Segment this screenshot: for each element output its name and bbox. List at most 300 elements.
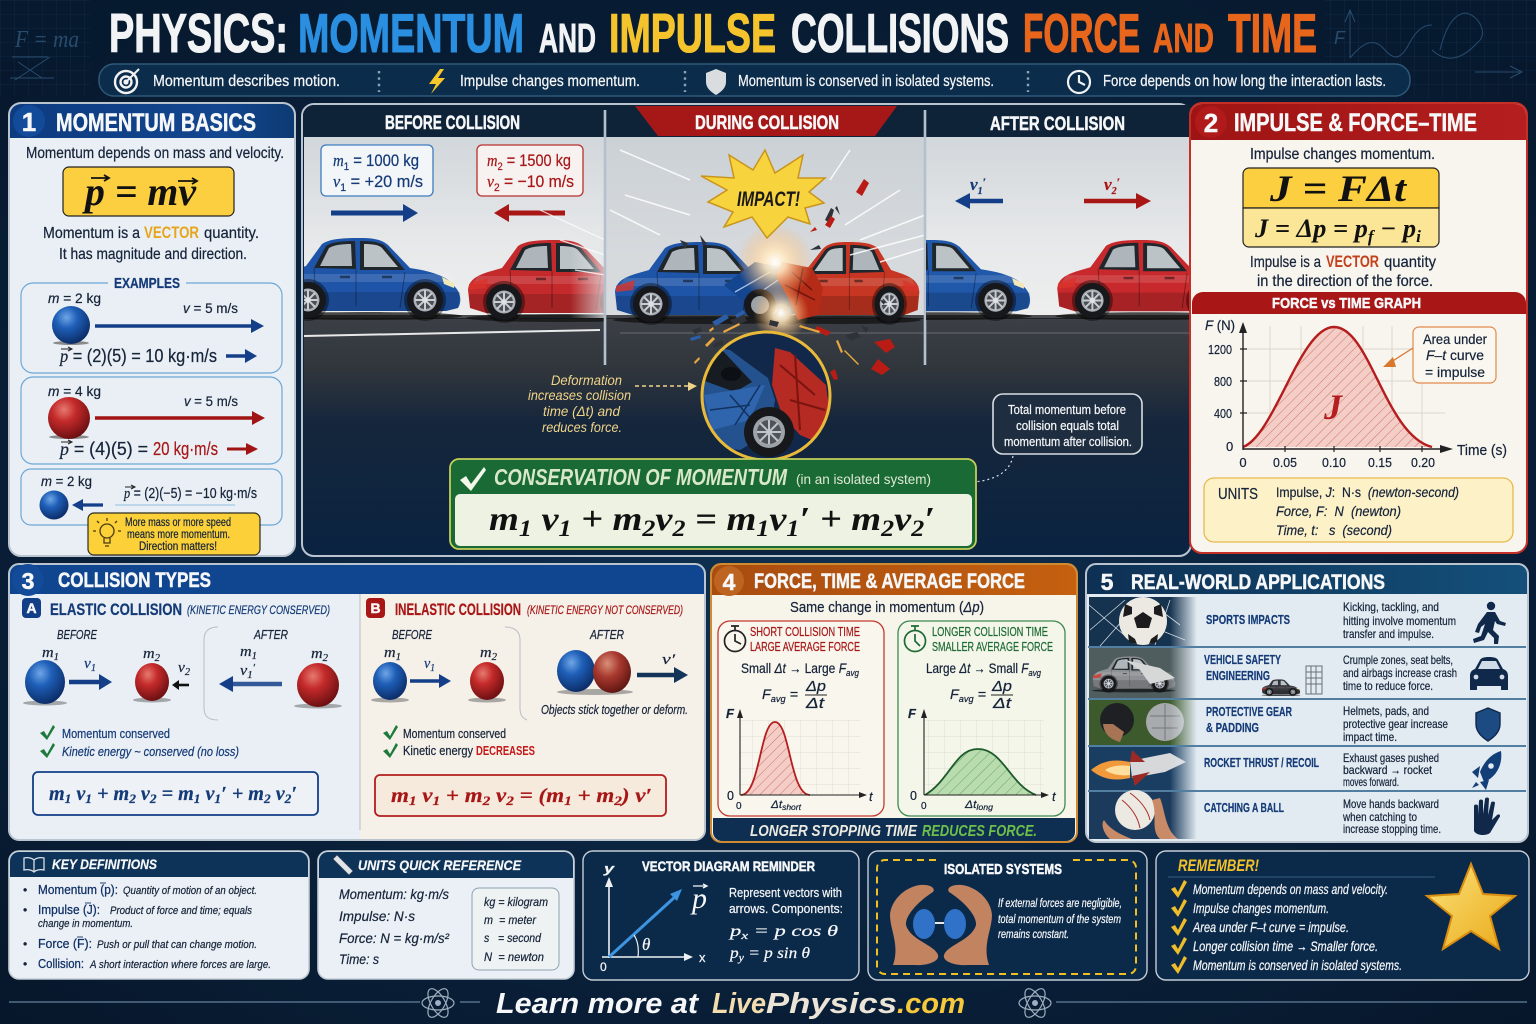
- conservation of momentum box: 2: [880, 516, 894, 541]
- unit abbreviations: kg = kilogram: [484, 895, 548, 909]
- force vs time chart: 400: [1214, 406, 1232, 421]
- inelastic formula: 2: [613, 793, 623, 808]
- icon: clock: [1068, 71, 1090, 93]
- definitions: Force (F):: [38, 937, 92, 951]
- subtitle bar: Momentum is conserved in isolated systems.: [738, 73, 994, 90]
- conservation of momentum box: 1: [786, 516, 799, 541]
- example 1: v = 5 m/s: [183, 300, 238, 316]
- definitions: [23, 883, 271, 971]
- decorative physics sketch: right: [1325, 0, 1536, 98]
- intro text: Momentum depends on mass and velocity.: [26, 145, 284, 162]
- inelastic checklist: DECREASES: [476, 744, 535, 758]
- heading: [13, 105, 256, 137]
- panel: remember: REMEMBER!: [1178, 857, 1259, 875]
- tip callout: means more momentum.: [127, 529, 230, 541]
- footer: .com: [897, 988, 965, 1020]
- elastic diagram: ′: [253, 663, 256, 674]
- before masses: car 1: [321, 145, 433, 196]
- conservation of momentum box: = m: [685, 501, 756, 538]
- elastic diagram: v: [240, 663, 247, 679]
- inelastic heading: B: [370, 600, 381, 616]
- chart: short collision: 0: [736, 801, 742, 812]
- panel 1: momentum basics: [9, 103, 295, 556]
- elastic diagram: 1: [54, 652, 59, 663]
- isolated text: If external forces are negligible,: [998, 896, 1122, 910]
- before masses: car 2: = 1500 kg: [503, 151, 571, 170]
- vector text: arrows. Components:: [729, 901, 843, 916]
- heading: during collision: [635, 106, 897, 136]
- inelastic diagram: AFTER: [589, 627, 624, 642]
- long collision card: Δt: [992, 695, 1012, 712]
- panel: remember: [1156, 851, 1529, 980]
- definitions: Collision:: [38, 957, 84, 971]
- icon: atom right: [1019, 986, 1051, 1020]
- short collision card: avg: [846, 668, 859, 678]
- after collision arrows: 1: [978, 186, 983, 197]
- icon: shield: [1476, 708, 1500, 741]
- icon: hand: [1474, 798, 1500, 835]
- icon: star: [1427, 864, 1515, 949]
- elastic diagram: 1: [247, 670, 253, 681]
- title: TIME: [1228, 2, 1317, 64]
- definitions: Quantity of motion of an object.: [123, 885, 257, 897]
- icon: target: [115, 69, 139, 93]
- conservation of momentum box: (in an isolated system): [796, 471, 931, 487]
- bubble: total momentum: [971, 394, 1142, 484]
- force vs time chart: 800: [1214, 374, 1232, 389]
- formula box J: i: [1416, 227, 1421, 246]
- conservation of momentum box: CONSERVATION OF MOMENTUM: [494, 464, 788, 490]
- after collision arrows: v: [1104, 175, 1112, 194]
- conservation of momentum box: v: [769, 501, 787, 538]
- vector text: p: [730, 923, 738, 940]
- conservation of momentum box: v: [532, 501, 560, 538]
- panel: isolated systems: ISOLATED SYSTEMS: [944, 861, 1062, 878]
- row: vehicle safety: Crumple zones, seat belts,: [1343, 653, 1453, 667]
- units box: Impulse, J: N·s (newton-second): [1276, 485, 1459, 500]
- formula box J: J = FΔt: [1269, 169, 1408, 210]
- inelastic checklist: [383, 725, 535, 758]
- force vs time chart: F (N): [1205, 317, 1235, 333]
- icon: stopwatch: [724, 626, 746, 652]
- before masses: car 1: 1: [344, 161, 349, 173]
- tip callout: Direction matters!: [139, 541, 217, 553]
- panel 5: real-world applications: [1086, 564, 1528, 842]
- inelastic formula: 1: [409, 793, 417, 808]
- footer: Learn more at: [496, 988, 699, 1020]
- row: vehicle safety: VEHICLE SAFETY: [1204, 652, 1281, 667]
- conservation of momentum box: 1: [756, 516, 769, 541]
- inelastic formula: 2: [481, 793, 491, 808]
- conservation of momentum box: m: [489, 501, 515, 538]
- formula box J: − p: [1374, 214, 1416, 243]
- panel 4: force, time and average force: [711, 564, 1077, 842]
- icon: check: [460, 467, 486, 491]
- before masses: car 1: 1: [340, 182, 346, 194]
- units box: Time, t: s (second): [1276, 523, 1392, 538]
- vector note: quantity.: [204, 225, 259, 242]
- isolated text: total momentum of the system: [998, 912, 1121, 926]
- heading: 2: [1204, 108, 1218, 138]
- conservation of momentum box: 1: [559, 516, 571, 541]
- elastic diagram: 1: [252, 651, 257, 662]
- conservation of momentum box: v: [655, 501, 673, 538]
- long collision card: LONGER COLLISION TIME: [932, 625, 1048, 639]
- formula box p = mv: [63, 167, 234, 216]
- definitions: A short interaction where forces are large.: [89, 959, 271, 971]
- row: catching a ball: when catching to: [1342, 810, 1417, 824]
- short collision card: [718, 621, 884, 816]
- checklist: Impulse changes momentum.: [1193, 900, 1329, 916]
- force vs time chart: 0.05: [1273, 455, 1297, 470]
- checklist: Momentum is conserved in isolated systems.: [1193, 957, 1402, 973]
- unit list: Force: N = kg·m/s²: [339, 930, 450, 946]
- subtitle bar: [99, 64, 1410, 96]
- before masses: car 1: v: [333, 172, 341, 191]
- footer: [9, 986, 1527, 1020]
- vector note: quantity: [1384, 254, 1436, 271]
- title: COLLISIONS: [791, 2, 1009, 64]
- elastic diagram: v: [178, 660, 185, 676]
- bubble: total momentum: Total momentum before: [1008, 402, 1126, 417]
- conservation of momentum box: 2: [641, 516, 655, 541]
- elastic diagram: 2: [323, 653, 328, 664]
- before masses: car 2: m: [487, 151, 497, 170]
- icon: lightning: [429, 69, 445, 94]
- after collision arrows: v: [970, 175, 978, 194]
- heading: 3: [22, 568, 34, 594]
- force vs time chart: 0.15: [1368, 455, 1392, 470]
- row: catching a ball: Move hands backward: [1343, 797, 1439, 811]
- tip callout: More mass or more speed: [125, 517, 231, 529]
- elastic diagram: m: [311, 646, 322, 662]
- conservation of momentum box: 1: [519, 516, 532, 541]
- elastic heading: ELASTIC COLLISION: [50, 600, 182, 619]
- footer: Live: [712, 988, 766, 1020]
- chart: long collision: 0: [910, 789, 917, 803]
- title: [109, 2, 1317, 64]
- title: AND: [1153, 15, 1214, 61]
- deformation text: increases collision: [528, 387, 631, 403]
- vector diagram: x: [699, 950, 706, 965]
- elastic diagram: 1: [91, 663, 96, 674]
- after collision cars: [926, 240, 1189, 321]
- heading: [12, 564, 211, 596]
- checklist: [1171, 880, 1402, 974]
- long collision card: SMALLER AVERAGE FORCE: [932, 640, 1053, 654]
- unit list: Momentum: kg·m/s: [339, 886, 449, 902]
- heading: [714, 566, 1025, 596]
- panel: collision scene: [270, 104, 1243, 556]
- before collision cars: [304, 238, 604, 323]
- short collision card: F: [762, 686, 771, 702]
- inelastic diagram: [371, 627, 688, 720]
- panel: vector diagram reminder: [583, 851, 859, 980]
- decorative physics sketch: left: [0, 0, 90, 95]
- long collision card: F: [950, 686, 959, 702]
- elastic formula: = m: [157, 784, 194, 805]
- inelastic formula: m: [391, 786, 406, 807]
- vector diagram: p: [690, 882, 707, 915]
- chart: short collision: Δt: [771, 799, 781, 811]
- row: catching a ball: [1089, 790, 1500, 839]
- unit abbreviations: s = second: [484, 931, 541, 945]
- inelastic diagram: m: [480, 645, 491, 661]
- chart: long collision: t: [1052, 789, 1057, 804]
- unit list: Time: s: [339, 951, 379, 967]
- example 3: [21, 469, 282, 525]
- chart: short collision: t: [869, 789, 874, 804]
- vector text: x: [740, 930, 748, 942]
- inelastic diagram: Objects stick together or deform.: [541, 702, 688, 717]
- heading: 1: [22, 107, 36, 137]
- vector diagram: 0: [600, 960, 607, 974]
- elastic formula: 2: [128, 791, 136, 806]
- elastic diagram: m: [42, 645, 53, 661]
- elastic diagram: v: [84, 656, 91, 672]
- elastic checklist: Kinetic energy ~ conserved (no loss): [62, 744, 239, 759]
- row: rocket thrust: ROCKET THRUST / RECOIL: [1204, 755, 1319, 770]
- graph heading: [1192, 292, 1526, 314]
- elastic formula: 2: [149, 791, 157, 806]
- elastic formula: 1: [214, 791, 221, 806]
- zoom circle: crumple detail: [700, 330, 832, 462]
- inelastic diagram: 2: [492, 652, 497, 663]
- vector note: [43, 223, 259, 263]
- row: sports impacts: [1089, 597, 1506, 646]
- inelastic formula: + m: [440, 786, 483, 807]
- chart: long collision: long: [976, 803, 994, 812]
- panel 3: collision types: [9, 564, 705, 840]
- definitions: •: [23, 903, 27, 917]
- elastic formula: ′: [291, 784, 297, 805]
- row: protective gear: PROTECTIVE GEAR: [1206, 704, 1292, 719]
- takeaway band: LONGER STOPPING TIME: [750, 823, 918, 840]
- after collision arrows: [955, 175, 1151, 209]
- elastic formula: 2: [263, 791, 271, 806]
- before masses: car 1: = +20 m/s: [346, 172, 423, 191]
- elastic formula: 1: [194, 791, 200, 806]
- row: sports impacts: SPORTS IMPACTS: [1206, 612, 1290, 627]
- heading: REAL-WORLD APPLICATIONS: [1131, 571, 1385, 594]
- heading: MOMENTUM BASICS: [56, 109, 256, 137]
- unit abbreviations: m = meter: [484, 913, 537, 927]
- footer: Physics: [766, 988, 897, 1020]
- example 1: [21, 283, 282, 373]
- short collision card: avg: [771, 694, 786, 704]
- elastic heading: [22, 598, 330, 619]
- vector text: = p cos θ: [748, 923, 838, 940]
- row: protective gear: & PADDING: [1206, 720, 1259, 735]
- short collision card: Δt: [805, 695, 825, 712]
- definitions: Push or pull that can change motion.: [97, 939, 257, 951]
- panel: vector diagram reminder: VECTOR DIAGRAM REMINDER: [642, 858, 815, 874]
- inelastic formula: 2: [505, 793, 515, 808]
- long collision card: Large Δt → Small F: [926, 661, 1029, 676]
- heading: [1195, 106, 1477, 138]
- arrow: car 2 velocity: [494, 204, 565, 222]
- heading: COLLISION TYPES: [58, 569, 211, 592]
- force vs time chart: 0.20: [1411, 455, 1435, 470]
- heading: [1101, 569, 1385, 595]
- before masses: car 2: [477, 145, 583, 196]
- conservation of momentum box: + m: [571, 501, 642, 538]
- short collision card: SHORT COLLISION TIME: [750, 625, 860, 639]
- example 2: p = (4)(5) =: [58, 439, 148, 459]
- before masses: car 2: 2: [497, 161, 503, 173]
- deformation text: reduces force.: [542, 419, 622, 435]
- elastic diagram: BEFORE: [57, 627, 97, 642]
- elastic formula: v: [71, 784, 86, 805]
- icon: light bulb: [93, 518, 121, 546]
- before fade: [540, 210, 606, 318]
- panel: units quick reference: UNITS QUICK REFERENCE: [358, 857, 522, 873]
- deformation text: [528, 372, 697, 435]
- row: vehicle safety: [1089, 648, 1508, 698]
- elastic diagram: AFTER: [253, 627, 288, 642]
- deformation text: Deformation: [551, 372, 622, 388]
- example 2: v = 5 m/s: [184, 393, 238, 409]
- force vs time chart: 1200: [1208, 342, 1232, 357]
- elastic formula: 2: [284, 791, 292, 806]
- intro: Impulse changes momentum.: [1250, 146, 1435, 163]
- vector note: Impulse is a: [1250, 254, 1321, 271]
- elastic checklist: [40, 725, 239, 759]
- row: rocket thrust: [1089, 747, 1501, 790]
- short collision card: =: [786, 686, 798, 702]
- after collision arrows: 2: [1111, 186, 1117, 197]
- isolated text: remains constant.: [998, 927, 1069, 941]
- inelastic formula: [375, 775, 666, 816]
- row: protective gear: Helmets, pads, and: [1343, 704, 1429, 718]
- elastic formula: ′ + m: [221, 784, 264, 805]
- panel: isolated systems: [868, 851, 1147, 980]
- inelastic formula: ) v′: [620, 786, 652, 807]
- chart: long collision: 0: [921, 801, 927, 812]
- chart: long collision: F: [908, 706, 917, 721]
- inelastic diagram: 1: [396, 652, 401, 663]
- callout: area under curve: [1383, 327, 1496, 383]
- hands and balls: [890, 885, 992, 965]
- long collision card: avg: [959, 694, 974, 704]
- conservation of momentum box: 2: [671, 516, 685, 541]
- chart: long collision: Δt: [965, 799, 975, 811]
- heading: FORCE, TIME & AVERAGE FORCE: [754, 570, 1025, 593]
- example 2: m = 4 kg: [48, 383, 101, 399]
- elastic checklist: Momentum conserved: [62, 726, 170, 741]
- after collision arrows: ′: [983, 175, 986, 189]
- row: sports impacts: transfer and impulse.: [1343, 627, 1434, 641]
- dividers: [605, 110, 925, 365]
- row: catching a ball: CATCHING A BALL: [1204, 800, 1284, 815]
- arrow: car 1 velocity: [331, 204, 418, 222]
- chart: short collision: [726, 706, 874, 812]
- conservation of momentum box: 2: [910, 516, 924, 541]
- elastic formula: + m: [92, 784, 129, 805]
- example 2: [21, 377, 282, 464]
- inelastic formula: v: [490, 786, 507, 807]
- heading: 4: [723, 569, 736, 595]
- crumple: [724, 262, 792, 312]
- inelastic diagram: v: [424, 656, 431, 672]
- long collision card: [898, 621, 1065, 816]
- heading: 5: [1101, 569, 1114, 595]
- force vs time chart: J: [1323, 387, 1343, 427]
- heading: before collision: BEFORE COLLISION: [385, 113, 520, 134]
- panel: units quick reference: [318, 851, 574, 979]
- elastic diagram: [23, 627, 342, 720]
- definitions: Momentum (p):: [38, 883, 118, 897]
- vector diagram: θ: [642, 935, 650, 954]
- elastic diagram: 2: [185, 667, 190, 678]
- inelastic formula: 1: [564, 793, 572, 808]
- bubble: total momentum: collision equals total: [1016, 418, 1119, 433]
- row: protective gear: [1089, 700, 1500, 745]
- example 1: p = (2)(5) = 10 kg·m/s: [58, 346, 217, 366]
- icon: car front: [1470, 657, 1508, 690]
- vector diagram: [600, 861, 707, 974]
- inelastic heading: (KINETIC ENERGY NOT CONSERVED): [527, 603, 683, 617]
- icon: runner: [1473, 602, 1506, 644]
- road and sky: [304, 137, 1189, 554]
- chart: short collision: F: [726, 706, 735, 721]
- icon: stopwatch: [904, 626, 926, 652]
- panel: key definitions: [9, 851, 309, 979]
- impact star: IMPACT!: [737, 188, 800, 211]
- inelastic diagram: m: [384, 645, 395, 661]
- subtitle bar: Force depends on how long the interaction lasts.: [1103, 73, 1386, 90]
- short collision card: Δp: [805, 678, 826, 695]
- elastic formula: v: [200, 784, 215, 805]
- row: sports impacts: Kicking, tackling, and: [1343, 600, 1439, 614]
- bubble: total momentum: momentum after collision.: [1004, 434, 1132, 449]
- example 2: 20 kg·m/s: [153, 439, 218, 459]
- example 3: m = 2 kg: [41, 474, 92, 489]
- before masses: car 2: v: [487, 172, 494, 191]
- elastic formula: 1: [65, 791, 71, 806]
- example 3: p = (2)(−5) = −10 kg·m/s: [123, 486, 257, 502]
- icon: ruler: [333, 855, 353, 875]
- chart: short collision: short: [782, 803, 802, 812]
- heading: after collision: AFTER COLLISION: [990, 114, 1125, 135]
- inelastic formula: = (m: [514, 786, 564, 807]
- before masses: car 2: = −10 m/s: [500, 172, 574, 191]
- vector text: Represent vectors with: [729, 885, 842, 900]
- vector text: = p sin θ: [744, 945, 810, 962]
- long collision card: Δp: [991, 678, 1012, 695]
- inelastic formula: 1: [433, 793, 440, 808]
- elastic diagram: 2: [155, 653, 160, 664]
- chart: short collision: 0: [727, 789, 734, 803]
- conservation of momentum box: ′: [924, 501, 935, 538]
- unit list: [339, 886, 450, 967]
- force vs time chart: 0.10: [1322, 455, 1346, 470]
- elastic heading: A: [26, 600, 37, 616]
- title: IMPULSE: [609, 2, 776, 64]
- vector note: in the direction of the force.: [1257, 273, 1433, 290]
- vector note: [1250, 252, 1436, 290]
- definitions: •: [23, 957, 27, 971]
- inelastic checklist: Momentum conserved: [403, 726, 506, 741]
- takeaway band: [713, 818, 1075, 841]
- definitions: •: [23, 883, 27, 897]
- before masses: car 2: 2: [494, 182, 500, 194]
- inelastic checklist: Kinetic energy: [403, 743, 473, 758]
- elastic diagram: m: [143, 646, 154, 662]
- heading: IMPULSE & FORCE–TIME: [1234, 109, 1477, 137]
- panel 2: impulse and force-time: [1190, 103, 1527, 553]
- long collision card: =: [974, 686, 986, 702]
